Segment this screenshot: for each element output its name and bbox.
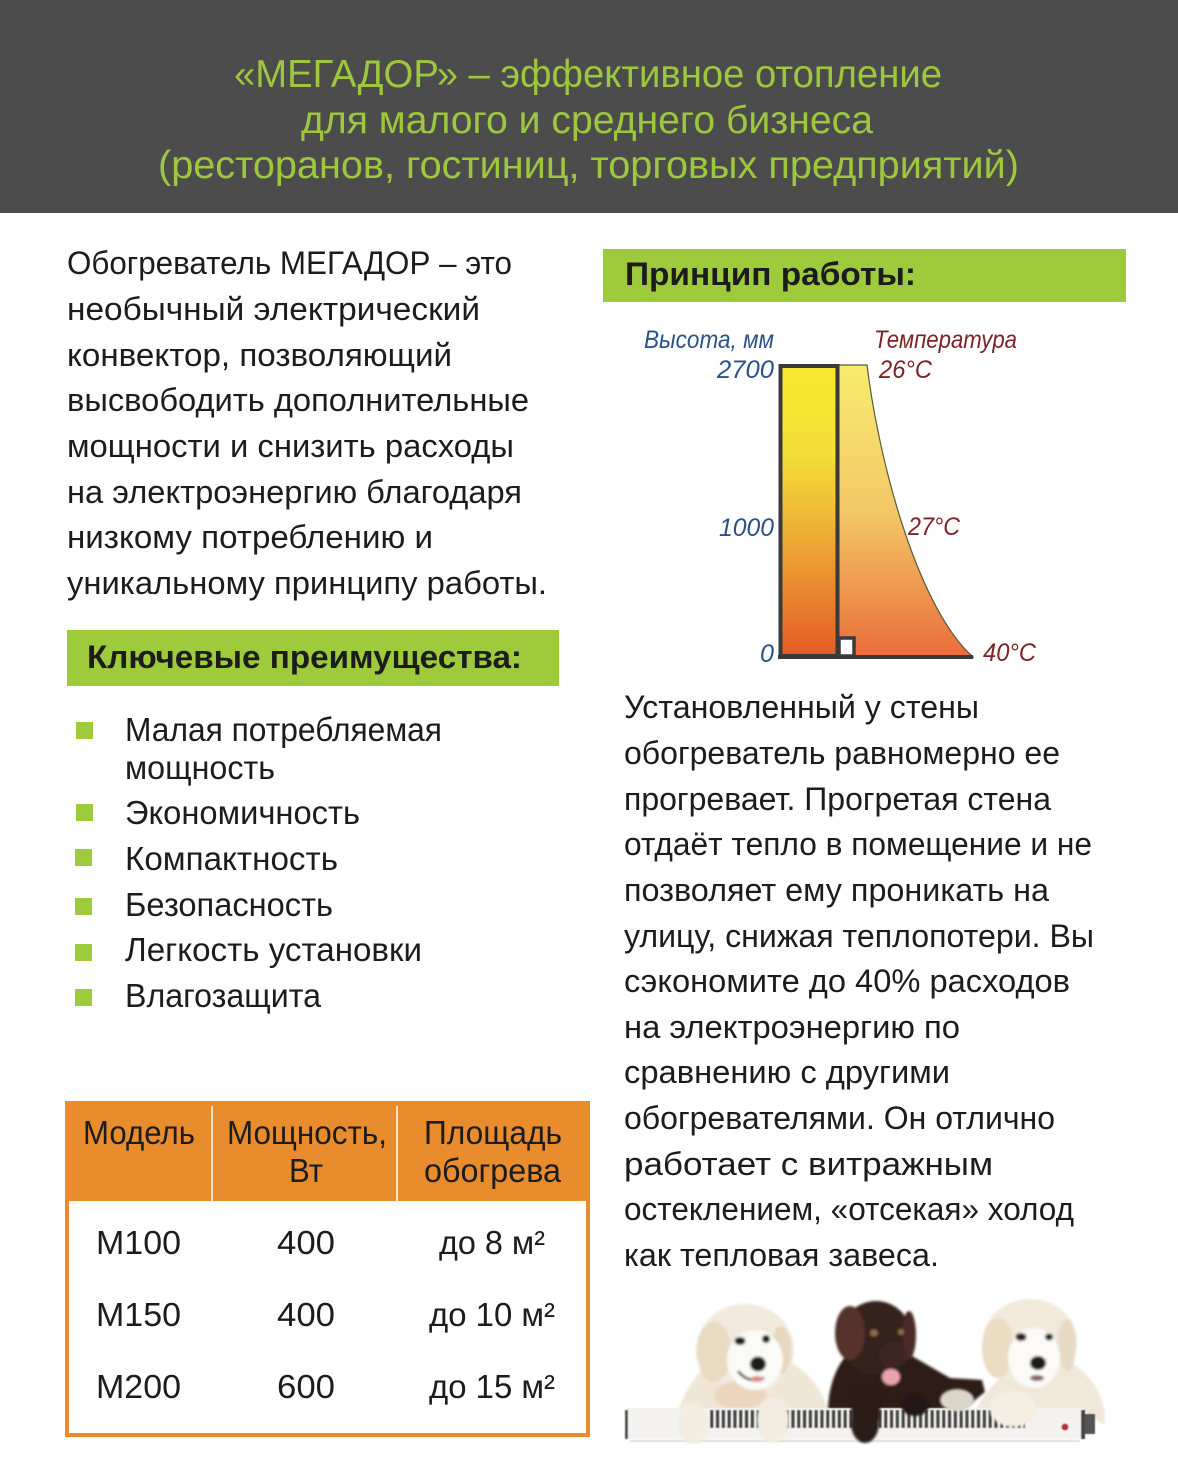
principle text block: остеклением, «отсекая» холод (624, 1191, 1074, 1227)
table: models (65, 1101, 590, 1435)
heater (625, 1408, 1095, 1442)
heater square (839, 638, 854, 656)
table row: M150 (96, 1296, 555, 1333)
table header (65, 1101, 590, 1201)
table row: M150: 400 (277, 1296, 335, 1333)
principle text block: прогревает. Прогретая стена (624, 781, 1051, 817)
intro text block: уникальному принципу работы. (67, 565, 547, 601)
puppy: left cream (678, 1304, 827, 1412)
height axis labels (644, 326, 774, 668)
principle text block: сэкономите до 40% расходов (624, 963, 1070, 999)
principle text block: на электроэнергию по (624, 1009, 960, 1045)
wall bar (780, 366, 838, 656)
table row: M200: 600 (277, 1368, 335, 1405)
principle text block: работает с витражным (624, 1146, 993, 1182)
intro text block: высвободить дополнительные (67, 382, 529, 418)
panel: principle heading (603, 249, 1126, 302)
table row: M200: M200 (96, 1368, 181, 1405)
header banner (0, 0, 1178, 213)
principle text block: как тепловая завеса. (624, 1237, 939, 1273)
temperature labels: 40°C (983, 639, 1037, 667)
advantages list: Компактность (125, 840, 338, 877)
intro text block: низкому потреблению и (67, 519, 433, 555)
temperature labels: 26°C (878, 356, 933, 384)
table row: M200: до 15 м² (429, 1368, 555, 1405)
intro text block: мощности и снизить расходы (67, 428, 514, 464)
advantages list (75, 711, 442, 1014)
puppy: center chocolate (828, 1301, 985, 1412)
panel: key advantages heading (67, 630, 559, 686)
table header: Вт (289, 1152, 323, 1189)
floor line (778, 655, 973, 659)
table row: M100: M100 (96, 1224, 181, 1261)
advantages list: Экономичность (125, 794, 360, 831)
principle text block: позволяет ему проникать на (624, 872, 1049, 908)
table row: M100: до 8 м² (439, 1224, 545, 1261)
advantages list: Влагозащита (125, 977, 322, 1014)
principle text block (624, 689, 1094, 1273)
intro text block: на электроэнергию благодаря (67, 474, 522, 510)
table row: M100: 400 (277, 1224, 335, 1261)
intro text block: необычный электрический (67, 291, 480, 327)
height axis labels: 1000 (719, 514, 774, 542)
table header: Модель (83, 1114, 195, 1151)
table row: M100 (96, 1224, 545, 1261)
intro text block: конвектор, позволяющий (67, 337, 452, 373)
advantages list: Малая потребляемая (125, 711, 442, 748)
illustration: puppies on heater (625, 1299, 1105, 1444)
advantages list: мощность (125, 749, 275, 786)
title: для малого и среднего бизнеса (301, 99, 873, 142)
intro text block: Обогреватель МЕГАДОР – это (67, 245, 512, 281)
principle text block: улицу, снижая теплопотери. Вы (624, 918, 1094, 954)
title: (ресторанов, гостиниц, торговых предприятий) (158, 144, 1019, 187)
advantages list: Безопасность (125, 886, 333, 923)
principle text block: отдаёт тепло в помещение и не (624, 826, 1092, 862)
title (158, 53, 1019, 187)
table header: Площадь (424, 1114, 562, 1151)
intro text block (67, 245, 547, 601)
principle text block: обогревателями. Он отлично (624, 1100, 1055, 1136)
table header: обогрева (424, 1152, 562, 1189)
table row: M200 (96, 1368, 555, 1405)
chart: temperature by height (644, 326, 1037, 668)
table row: M150: до 10 м² (429, 1296, 555, 1333)
panel: principle heading: Принцип работы: (625, 256, 916, 292)
principle text block: сравнению с другими (624, 1054, 950, 1090)
height axis labels: Высота, мм (644, 326, 774, 354)
table row: M150: M150 (96, 1296, 181, 1333)
title: «МЕГАДОР» – эффективное отопление (234, 53, 942, 96)
panel: key advantages heading: Ключевые преимущества: (87, 639, 522, 675)
puppy paws (678, 1385, 1036, 1444)
height axis labels: 0 (760, 640, 774, 668)
principle text block: Установленный у стены (624, 689, 979, 725)
table header: Мощность, (227, 1114, 387, 1151)
temperature labels: 27°C (907, 513, 961, 541)
advantages list: Легкость установки (125, 931, 422, 968)
temperature curve area (838, 365, 973, 657)
puppy: right cream (975, 1299, 1105, 1425)
temperature labels (874, 326, 1037, 667)
temperature labels: Температура (874, 326, 1017, 354)
height axis labels: 2700 (716, 356, 774, 384)
principle text block: обогреватель равномерно ее (624, 735, 1060, 771)
